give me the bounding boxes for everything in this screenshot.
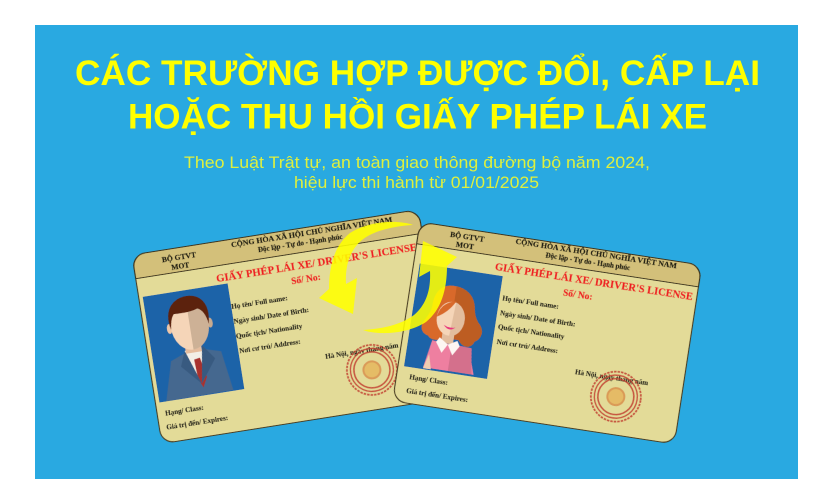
card header text (160, 214, 395, 273)
stamp (587, 368, 644, 425)
card title: GIẤY PHÉP LÁI XE/ DRIVER'S LICENSE (494, 260, 694, 303)
card header text: MOT (455, 240, 475, 251)
card header text (448, 226, 678, 282)
arrow: curved yellow left (319, 222, 413, 314)
card field labels: Nơi cư trú/ Address: (496, 338, 558, 355)
photo: woman (404, 263, 503, 379)
stamp (343, 341, 401, 398)
card header text: BỘ GTVT (450, 230, 485, 244)
card field labels: Hà Nội, ngày tháng năm (325, 341, 399, 361)
card field labels: Giá trị đến/ Expires: (166, 414, 229, 432)
card header text: CỘNG HÒA XÃ HỘI CHỦ NGHĨA VIỆT NAM (515, 236, 678, 270)
subtitle: Theo Luật Trật tự, an toàn giao thông đường bộ năm 2024, (184, 154, 650, 172)
card title: Số/ No: (290, 272, 322, 287)
subtitle (184, 154, 650, 192)
right licence card (393, 221, 702, 444)
title: HOẶC THU HỒI GIẤY PHÉP LÁI XE (128, 96, 707, 136)
card field labels: Ngày sinh/ Date of Birth: (233, 306, 309, 326)
card field labels: Hạng/ Class: (165, 404, 204, 418)
left licence card (132, 210, 448, 444)
card title: GIẤY PHÉP LÁI XE/ DRIVER'S LICENSE (215, 240, 418, 285)
card field labels (406, 282, 658, 431)
card header text: Độc lập - Tự do - Hạnh phúc (257, 233, 343, 254)
card field labels: Quốc tịch/ Nationality (497, 323, 565, 341)
card field labels: Họ tên/ Full name: (231, 294, 288, 311)
card field labels: Giá trị đến/ Expires: (406, 387, 469, 404)
card field labels: Họ tên/ Full name: (502, 294, 559, 311)
card field labels (149, 278, 406, 432)
subtitle: hiệu lực thi hành từ 01/01/2025 (294, 174, 539, 192)
arrow: curved yellow right (363, 241, 457, 333)
card header text: CỘNG HÒA XÃ HỘI CHỦ NGHĨA VIỆT NAM (230, 214, 393, 249)
card header text: MOT (171, 260, 190, 272)
card header text: BỘ GTVT (161, 250, 197, 264)
card field labels: Hạng/ Class: (409, 373, 448, 387)
card field labels: Hà Nội, ngày tháng năm (574, 368, 649, 387)
card header text: Độc lập - Tự do - Hạnh phúc (545, 251, 631, 272)
title: CÁC TRƯỜNG HỢP ĐƯỢC ĐỔI, CẤP LẠI (75, 53, 760, 93)
photo: man (143, 283, 244, 403)
card field labels: Nơi cư trú/ Address: (239, 338, 301, 355)
card field labels: Quốc tịch/ Nationality (235, 322, 303, 341)
title (75, 53, 760, 136)
card title: Số/ No: (562, 288, 593, 303)
card field labels: Ngày sinh/ Date of Birth: (500, 309, 576, 329)
